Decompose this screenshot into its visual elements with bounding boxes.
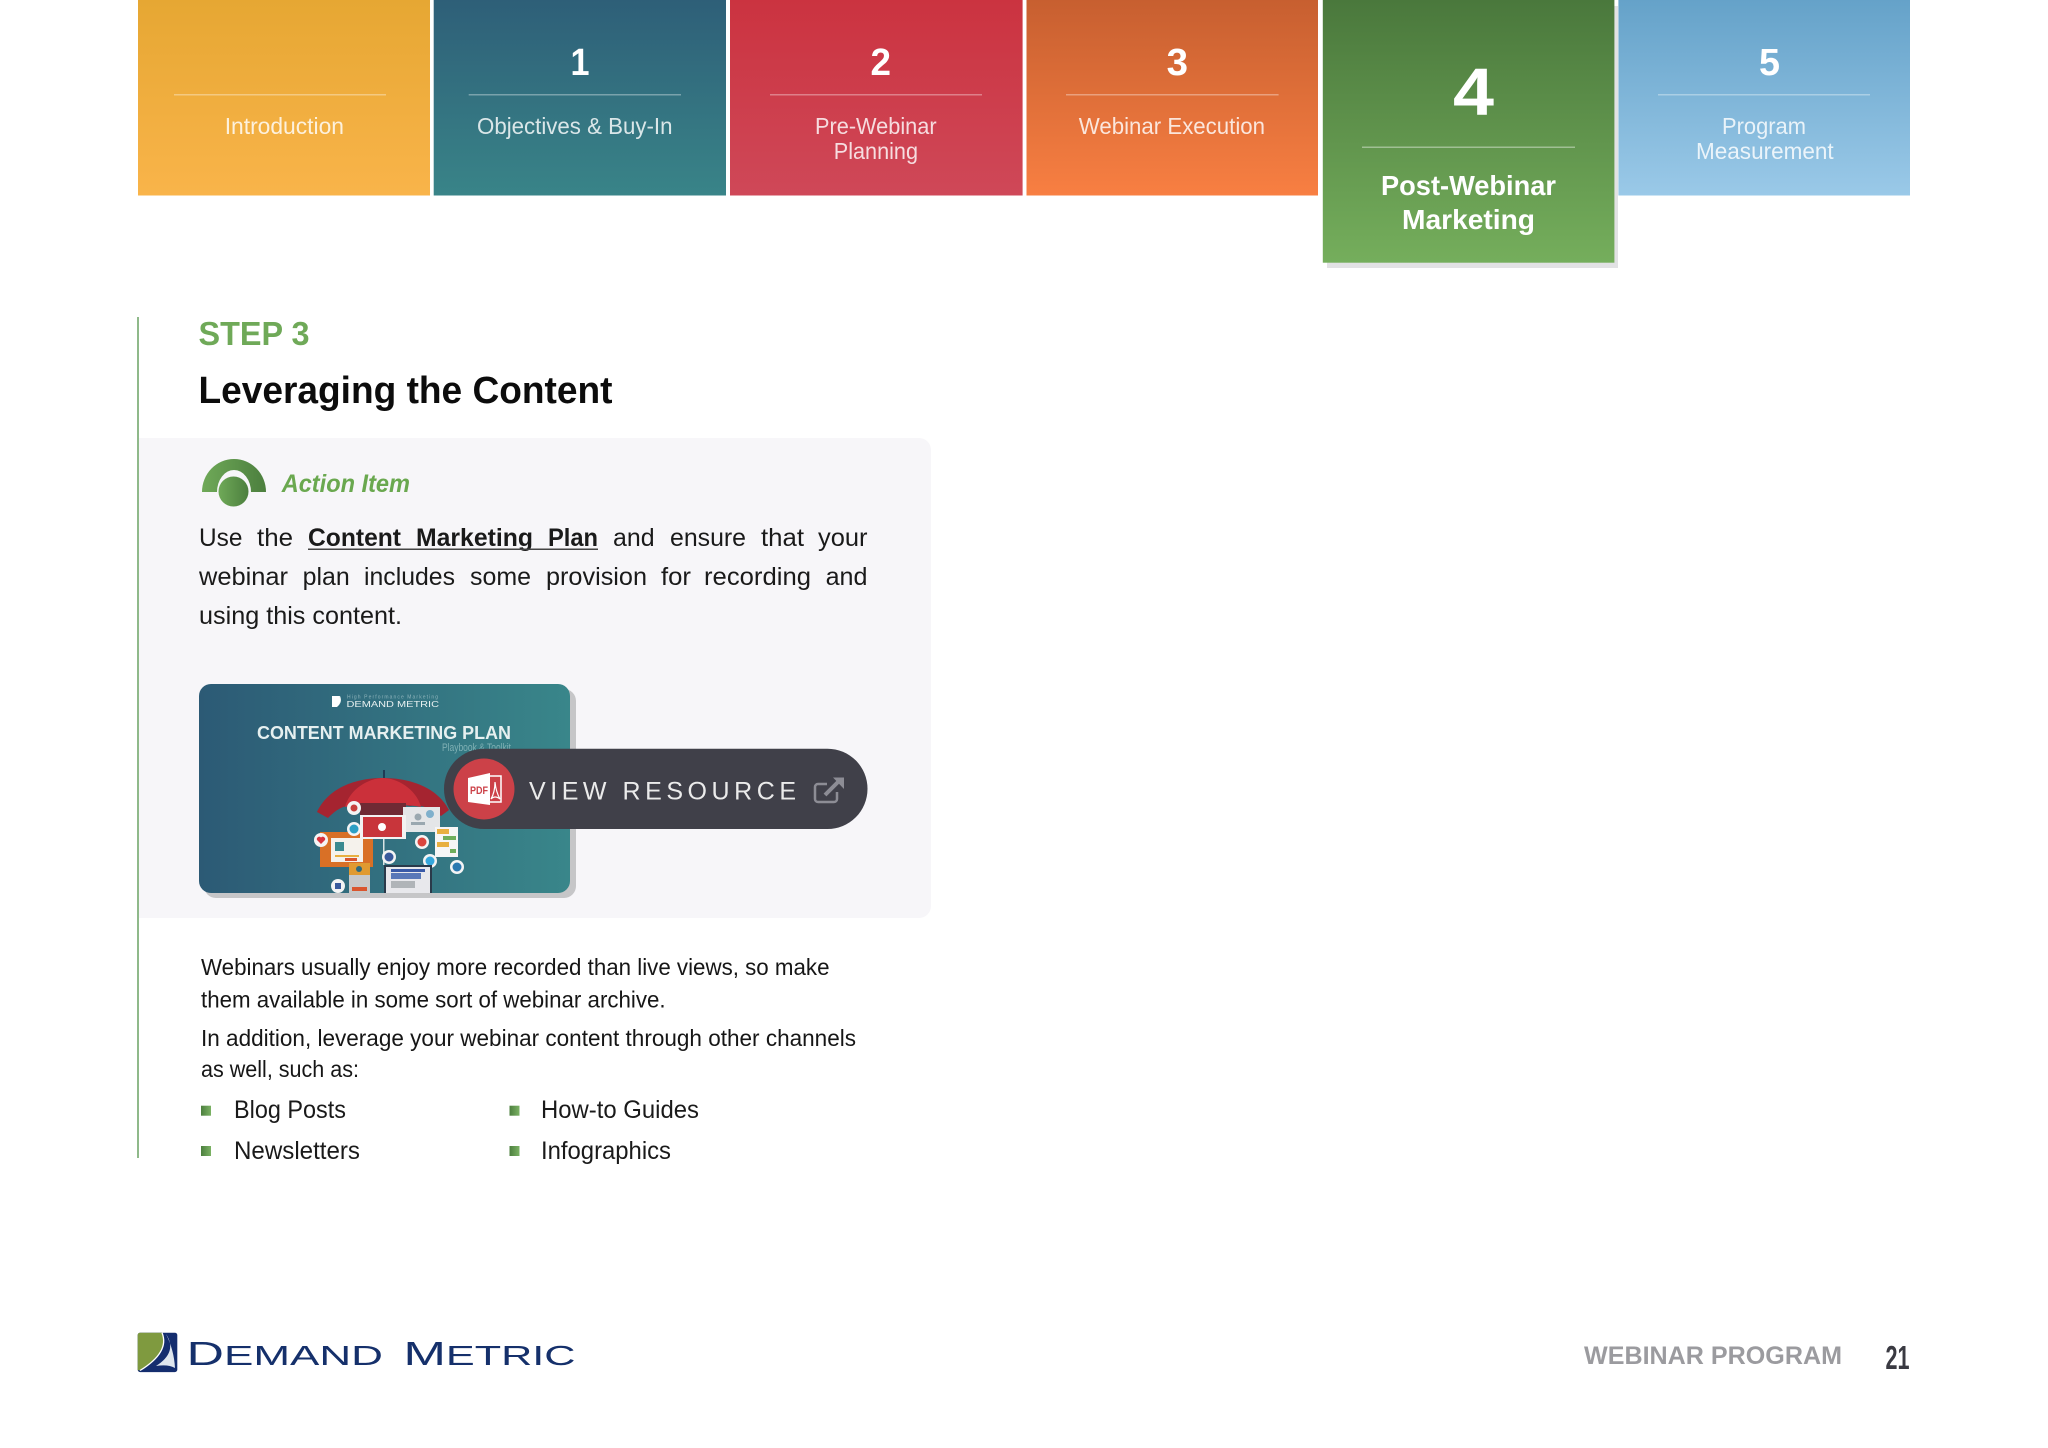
action item text: Marketing (416, 524, 533, 552)
channel list (201, 1096, 699, 1165)
tab: objectives and buy-in: Objectives & Buy-In (477, 113, 672, 139)
wordmark: METRIC (404, 1336, 575, 1373)
action item text: Content (308, 524, 402, 552)
action item text: that (761, 524, 804, 552)
list item: how-to guides: How-to Guides (541, 1096, 699, 1124)
icon: demand metric mark (138, 1333, 177, 1372)
tab: post-webinar marketing (active): 4 (1453, 55, 1494, 130)
tab: introduction: Introduction (225, 113, 344, 139)
step label: STEP 3 (198, 315, 310, 352)
resource thumbnail (199, 684, 576, 898)
list item: infographics: Infographics (541, 1137, 671, 1165)
view resource button (444, 749, 868, 829)
icon: pdf: PDF (470, 785, 488, 797)
tab: program measurement: 5 (1759, 42, 1780, 84)
action item text: Use (199, 524, 242, 552)
action item text: for (661, 563, 691, 591)
action item text: includes (364, 563, 455, 591)
page number: 21 (1886, 1339, 1910, 1376)
thumbnail logo: DEMAND METRIC (346, 699, 439, 709)
action item text: recording (704, 563, 811, 591)
icon: action item (202, 459, 266, 506)
tab: objectives and buy-in: 1 (570, 42, 590, 84)
tab: webinar execution: Webinar Execution (1079, 113, 1265, 139)
tab: introduction (138, 0, 430, 196)
action item text: your (818, 524, 868, 552)
tab: post-webinar marketing (active): Post-Webinar (1381, 170, 1556, 201)
tab: webinar execution (1026, 0, 1318, 196)
thumbnail logo: High Performance Marketing (347, 694, 438, 700)
intro paragraphs: Webinars usually enjoy more recorded than live views, so make (201, 954, 830, 980)
footer program title: WEBINAR PROGRAM (1584, 1342, 1842, 1370)
section accent line (137, 317, 139, 1158)
icon: external link (815, 778, 844, 802)
action item text: the (257, 524, 293, 552)
tab: objectives and buy-in (434, 0, 726, 196)
wordmark (186, 1336, 575, 1373)
list item: blog posts: Blog Posts (234, 1096, 346, 1124)
action item text: using this content. (199, 602, 402, 630)
tab: webinar execution: 3 (1167, 42, 1188, 84)
icon: pdf (454, 758, 514, 820)
action item text (198, 524, 868, 630)
tab: pre-webinar planning: 2 (870, 42, 891, 84)
action item text: plan (303, 563, 350, 591)
tab: program measurement: Program (1722, 113, 1806, 139)
action item text: some (470, 563, 531, 591)
action item text: webinar (198, 563, 288, 591)
tab: pre-webinar planning: Pre-Webinar (815, 113, 937, 139)
panel: action item (139, 438, 931, 918)
action item text: Plan (548, 524, 598, 552)
thumbnail logo (332, 694, 439, 709)
intro paragraphs (201, 954, 856, 1082)
intro paragraphs: as well, such as: (201, 1056, 359, 1082)
tab: pre-webinar planning (730, 0, 1023, 196)
heading: Leveraging the Content (198, 370, 613, 412)
action item text: provision (546, 563, 647, 591)
action item text: and (613, 524, 655, 552)
wordmark: DEMAND (186, 1336, 383, 1373)
intro paragraphs: them available in some sort of webinar archive. (201, 986, 666, 1012)
action item text: and (826, 563, 868, 591)
tab: pre-webinar planning: Planning (834, 138, 918, 164)
thumbnail subtitle: Playbook & Toolkit (442, 742, 511, 754)
footer logo (138, 1333, 575, 1373)
tab: post-webinar marketing (active) (1323, 0, 1618, 268)
thumbnail illustration: umbrella and content icons (314, 770, 464, 893)
tab: program measurement: Measurement (1696, 138, 1834, 164)
action item label: Action Item (281, 470, 410, 498)
tab: program measurement (1618, 0, 1910, 196)
list item: newsletters: Newsletters (234, 1137, 360, 1165)
action item text: ensure (670, 524, 746, 552)
navigation tabs (138, 0, 1910, 268)
tab: post-webinar marketing (active): Marketing (1402, 204, 1535, 235)
thumbnail title: CONTENT MARKETING PLAN (257, 723, 511, 743)
intro paragraphs: In addition, leverage your webinar content through other channels (201, 1025, 856, 1051)
button label: VIEW RESOURCE (529, 778, 796, 806)
